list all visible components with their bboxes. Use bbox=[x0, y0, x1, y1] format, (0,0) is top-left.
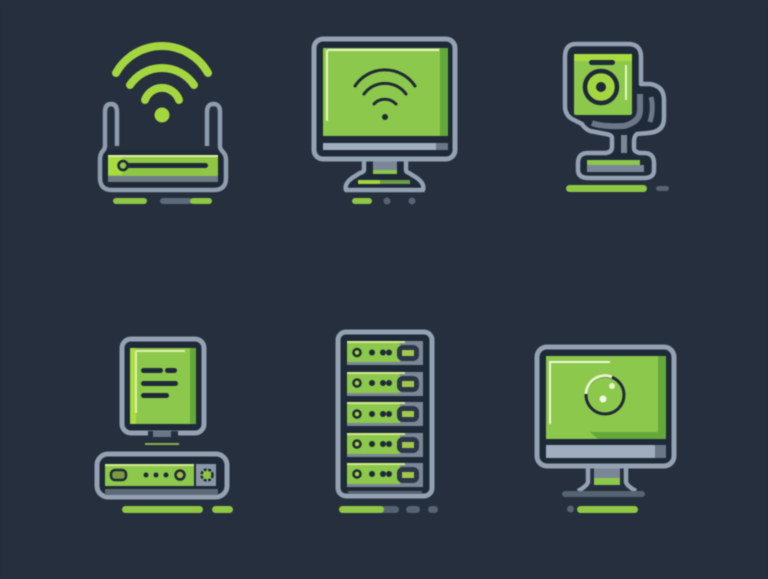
monitor screen bbox=[546, 356, 666, 439]
rack frame bbox=[338, 332, 432, 496]
monitor chin bbox=[323, 143, 448, 150]
router status bar bbox=[120, 163, 208, 168]
desktop unit controls bbox=[111, 470, 126, 480]
tablet frame bbox=[122, 339, 204, 433]
icon: server rack bbox=[338, 332, 438, 513]
icon: monitor with lens bbox=[537, 347, 674, 513]
lens symbol bbox=[586, 376, 624, 414]
webcam silhouette bbox=[565, 44, 664, 178]
router outline with antennas bbox=[103, 150, 223, 188]
monitor frame bbox=[314, 39, 455, 159]
monitor frame bbox=[537, 347, 674, 466]
router caption bars bbox=[113, 198, 147, 204]
monitor screen bbox=[323, 48, 448, 136]
wifi symbol bbox=[355, 70, 415, 120]
desktop unit panel bbox=[105, 464, 194, 486]
server unit 4 bbox=[347, 433, 423, 457]
webcam lens bbox=[589, 60, 615, 65]
monitor stand bbox=[578, 462, 636, 491]
icon: wifi router bbox=[100, 46, 226, 204]
icon: tablet on a device bbox=[97, 339, 233, 513]
wifi signal arcs bbox=[116, 46, 208, 122]
icon: monitor with wifi bbox=[314, 39, 455, 204]
desktop unit frame bbox=[97, 454, 227, 497]
monitor caption bars bbox=[352, 198, 372, 204]
webcam stand bbox=[621, 135, 627, 153]
rack caption bars bbox=[339, 506, 399, 513]
desktop caption bars bbox=[122, 506, 203, 513]
monitor base bbox=[562, 491, 645, 497]
webcam screen bbox=[574, 54, 632, 115]
tablet text lines bbox=[141, 368, 163, 373]
server unit 2 bbox=[347, 372, 423, 396]
monitor stand bbox=[346, 156, 423, 190]
server unit 3 bbox=[347, 402, 423, 426]
gear icon bbox=[202, 470, 212, 480]
server unit 1 bbox=[347, 341, 423, 365]
router body bbox=[108, 155, 218, 177]
server unit 5 bbox=[347, 463, 423, 487]
monitor chin bbox=[546, 445, 666, 458]
tablet screen bbox=[130, 348, 196, 424]
monitor caption bars bbox=[567, 506, 574, 512]
icon: webcam bbox=[565, 44, 669, 192]
webcam rear housing bbox=[592, 94, 640, 126]
webcam caption bars bbox=[566, 185, 647, 192]
tablet neck bbox=[148, 431, 178, 442]
